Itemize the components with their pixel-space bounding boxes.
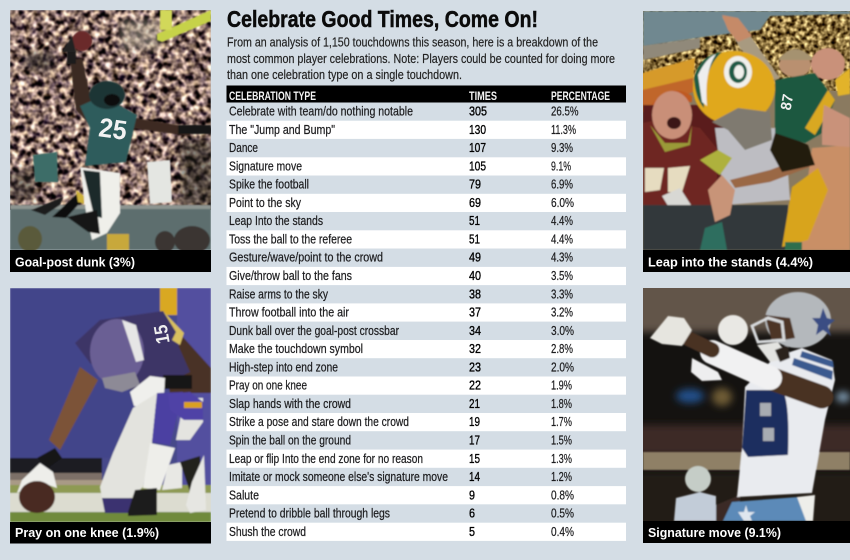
table rows: 1.8% xyxy=(551,397,572,411)
table rows: 21 xyxy=(469,397,480,411)
table rows: 9 xyxy=(469,488,475,502)
table rows: 5 xyxy=(469,525,475,539)
table header: PERCENTAGE xyxy=(551,91,610,103)
intro text: From an analysis of 1,150 touchdowns this season, here is a breakdown of the xyxy=(227,34,598,50)
table rows: Celebrate with team/do nothing notable xyxy=(229,104,413,118)
table rows: Toss the ball to the referee xyxy=(229,232,352,246)
table header xyxy=(226,86,626,103)
panel: signature move photo xyxy=(635,280,850,543)
table rows: Leap or flip Into the end zone for no reason xyxy=(229,452,423,466)
panel: leap into the stands photo xyxy=(642,11,850,272)
table rows: 4.3% xyxy=(551,251,573,265)
table rows: 32 xyxy=(469,342,481,356)
table rows: 1.7% xyxy=(551,415,572,429)
table rows: 4.4% xyxy=(551,232,573,246)
table rows: Make the touchdown symbol xyxy=(229,342,363,356)
table rows: 37 xyxy=(469,306,481,320)
table rows: Spin the ball on the ground xyxy=(229,434,351,448)
table rows: 15 xyxy=(469,452,480,466)
table rows: Dunk ball over the goal-post crossbar xyxy=(229,324,399,338)
photo: player dunking over the crossbar xyxy=(10,10,211,250)
caption: pray on one knee: Pray on one knee (1.9%) xyxy=(15,526,159,540)
table rows: 69 xyxy=(469,196,481,210)
table rows: 26.5% xyxy=(551,104,578,118)
photo: player posing xyxy=(643,288,850,521)
table rows: 1.3% xyxy=(551,452,572,466)
table rows: 1.2% xyxy=(551,470,572,484)
table rows: 3.5% xyxy=(551,269,573,283)
table rows: Spike the football xyxy=(229,178,309,192)
table rows: Dance xyxy=(229,141,258,155)
table rows: 19 xyxy=(469,415,480,429)
heading: Celebrate Good Times, Come On! xyxy=(227,6,538,32)
table header: CELEBRATION TYPE xyxy=(229,91,316,103)
table rows: 6.9% xyxy=(551,178,573,192)
table rows: 51 xyxy=(469,214,480,228)
table rows: 3.2% xyxy=(551,306,573,320)
table rows: 0.4% xyxy=(551,525,574,539)
intro text xyxy=(227,34,615,82)
table rows: Point to the sky xyxy=(229,196,302,210)
table rows: 0.5% xyxy=(551,507,574,521)
table rows: 14 xyxy=(469,470,480,484)
table rows: 23 xyxy=(469,360,481,374)
table rows: 22 xyxy=(469,379,481,393)
table rows: 79 xyxy=(469,178,481,192)
caption bar xyxy=(643,521,850,543)
table rows: Shush the crowd xyxy=(229,525,306,539)
table rows: High-step into end zone xyxy=(229,360,338,374)
intro text: than one celebration type on a single touchdown. xyxy=(227,67,462,82)
table rows: 1.9% xyxy=(551,379,572,393)
table rows: Strike a pose and stare down the crowd xyxy=(229,415,409,429)
table rows: Gesture/wave/point to the crowd xyxy=(229,251,383,265)
row stripes xyxy=(226,121,626,541)
table header: TIMES xyxy=(469,91,497,103)
table rows: Pray on one knee xyxy=(229,379,307,393)
table rows: 40 xyxy=(469,269,481,283)
caption: leap into the stands: Leap into the stands (4.4%) xyxy=(648,256,813,270)
table rows: Throw football into the air xyxy=(229,306,349,320)
table rows: 6.0% xyxy=(551,196,574,210)
table rows: Slap hands with the crowd xyxy=(229,397,351,411)
table rows: 3.3% xyxy=(551,287,573,301)
caption bar xyxy=(10,522,211,544)
table rows: 130 xyxy=(469,123,486,137)
table rows: Raise arms to the sky xyxy=(229,287,329,301)
photo: player kneeling with ball xyxy=(10,288,211,522)
table rows: Signature move xyxy=(229,159,302,173)
table rows: 2.8% xyxy=(551,342,573,356)
table rows: 34 xyxy=(469,324,481,338)
caption: goal-post dunk: Goal-post dunk (3%) xyxy=(15,256,135,270)
caption bar xyxy=(643,250,850,272)
table rows xyxy=(229,104,578,539)
table rows: Give/throw ball to the fans xyxy=(229,269,352,283)
caption bar xyxy=(10,250,211,272)
table rows: 49 xyxy=(469,251,481,265)
caption: signature move: Signature move (9.1%) xyxy=(648,526,781,540)
table rows: 6 xyxy=(469,507,475,521)
table rows: 9.1% xyxy=(551,159,571,173)
table rows: 105 xyxy=(469,159,486,173)
table rows: 1.5% xyxy=(551,434,572,448)
table rows: The "Jump and Bump" xyxy=(229,123,335,137)
table rows: 51 xyxy=(469,232,480,246)
table rows: 305 xyxy=(469,104,487,118)
table rows: 2.0% xyxy=(551,360,574,374)
jersey number: 25 xyxy=(97,112,129,146)
intro text: most common player celebrations. Note: Players could be counted for doing more xyxy=(227,51,615,66)
table rows: Imitate or mock someone else's signature move xyxy=(229,470,448,484)
table rows: 4.4% xyxy=(551,214,573,228)
table rows: 17 xyxy=(469,434,480,448)
panel: goal-post dunk photo xyxy=(10,10,215,272)
table rows: 11.3% xyxy=(551,123,576,137)
panel: pray on one knee photo xyxy=(10,288,211,544)
table rows: 9.3% xyxy=(551,141,573,155)
table rows: 3.0% xyxy=(551,324,574,338)
jersey number: 87 xyxy=(778,93,797,112)
table rows: Leap Into the stands xyxy=(229,214,323,228)
table rows: 0.8% xyxy=(551,488,574,502)
photo: player leaping into the crowd xyxy=(643,11,850,250)
table rows: Pretend to dribble ball through legs xyxy=(229,507,390,521)
table rows: Salute xyxy=(229,488,259,502)
jersey number: 15 xyxy=(151,323,175,345)
table: celebration types xyxy=(226,86,626,541)
table rows: 107 xyxy=(469,141,486,155)
table rows: 38 xyxy=(469,287,481,301)
